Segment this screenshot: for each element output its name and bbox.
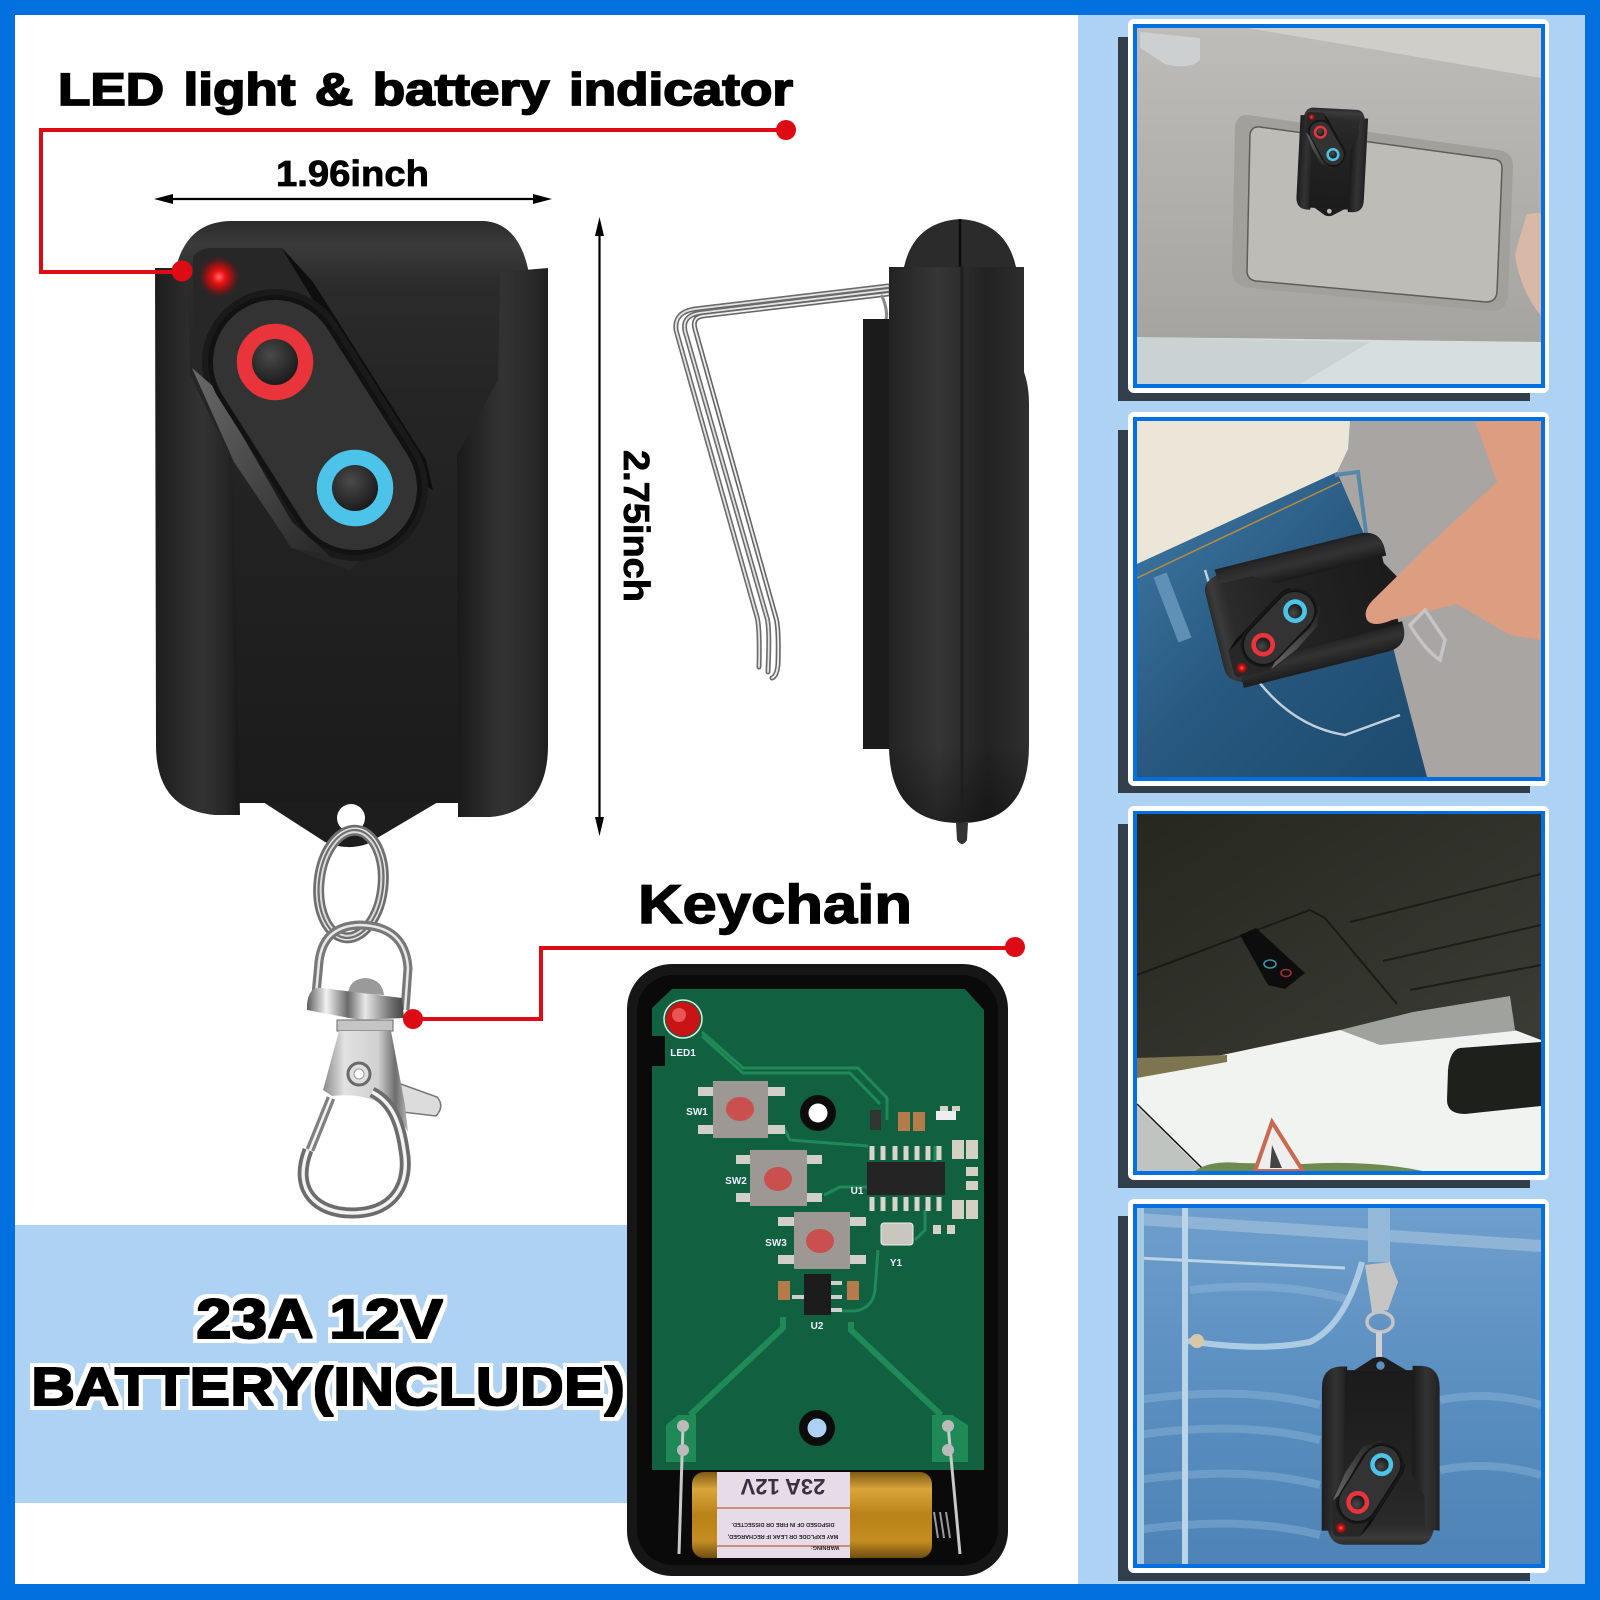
mounting holes <box>799 1095 836 1446</box>
photo: jeans pocket scene <box>1137 421 1541 777</box>
switch SW3: SW3 <box>765 1238 787 1249</box>
battery label: 23A 12V BATTERY(INCLUDE) <box>31 1287 625 1417</box>
panel: car interior photo <box>1118 806 1549 1188</box>
card blue border <box>1133 417 1545 781</box>
card blue border <box>1133 24 1545 388</box>
remote side view <box>863 219 1029 844</box>
card blue border <box>1133 811 1545 1175</box>
photo: jeans with hanging remote <box>1137 1208 1541 1564</box>
chip U1 <box>851 1146 945 1211</box>
card frame <box>1128 19 1549 393</box>
battery 23A 12V: DISPOSED OF IN FIRE OR DISSECTED. <box>731 1521 834 1527</box>
height dimension arrow <box>595 217 604 836</box>
chip U1: U1 <box>851 1186 864 1197</box>
LED component: LED1 <box>670 1048 696 1059</box>
card shadow <box>1118 1216 1530 1581</box>
battery 23A 12V: 23A 12V <box>740 1474 825 1499</box>
switch SW1 <box>686 1081 785 1138</box>
belt clip wire <box>676 286 888 678</box>
battery 23A 12V <box>692 1472 932 1558</box>
panel: pocket photo <box>1118 412 1549 793</box>
keychain hardware <box>303 825 441 1213</box>
white product area <box>15 15 1078 1584</box>
card shadow <box>1118 824 1530 1188</box>
open remote case with circuit board <box>627 964 1008 1576</box>
switch SW2 <box>725 1150 822 1206</box>
LED component <box>664 1000 702 1059</box>
width label: 1.96inch: 1.96inch <box>276 153 429 194</box>
light blue battery band <box>15 1225 640 1503</box>
circuit board <box>652 989 984 1470</box>
battery label: 23A 12V BATTERY(INCLUDE): 23A 12V <box>196 1287 443 1350</box>
photo: visor scene <box>1137 28 1541 384</box>
switch SW1: SW1 <box>686 1107 708 1118</box>
width dimension arrow <box>154 194 552 204</box>
battery 23A 12V: MAY EXPLODE OR LEAK IF RECHARGED, <box>727 1533 838 1539</box>
panel: jeans belt loop photo <box>1118 1199 1549 1581</box>
card shadow <box>1118 430 1530 793</box>
capacitors and resistors <box>778 1106 978 1300</box>
panel: sun visor photo <box>1118 19 1549 401</box>
case shell <box>627 964 1008 1576</box>
crystal Y1 <box>881 1223 913 1269</box>
heading: Keychain: Keychain <box>638 873 912 935</box>
switch SW2: SW2 <box>725 1176 747 1187</box>
remote control front view <box>155 221 548 847</box>
regulator U2: U2 <box>811 1321 824 1332</box>
card frame <box>1128 806 1549 1180</box>
callout line: LED indicator <box>41 120 796 282</box>
case interior <box>637 975 998 1565</box>
battery contacts and spring <box>677 1420 960 1554</box>
battery 23A 12V: WARNING: <box>811 1544 839 1550</box>
photo: visor in car scene <box>1137 814 1541 1171</box>
card frame <box>1128 1199 1549 1573</box>
switch SW3 <box>765 1212 866 1269</box>
card frame <box>1128 412 1549 786</box>
height label: 2.75inch: 2.75inch <box>616 450 657 602</box>
card blue border <box>1133 1204 1545 1568</box>
callout line: keychain <box>403 937 1025 1029</box>
light blue photo column <box>1078 15 1585 1584</box>
card shadow <box>1118 37 1530 401</box>
crystal Y1: Y1 <box>890 1258 903 1269</box>
heading: LED light & battery indicator: LED light & battery indicator <box>58 64 793 115</box>
regulator U2 <box>792 1274 842 1332</box>
battery label: 23A 12V BATTERY(INCLUDE): BATTERY(INCLUDE) <box>31 1357 625 1417</box>
